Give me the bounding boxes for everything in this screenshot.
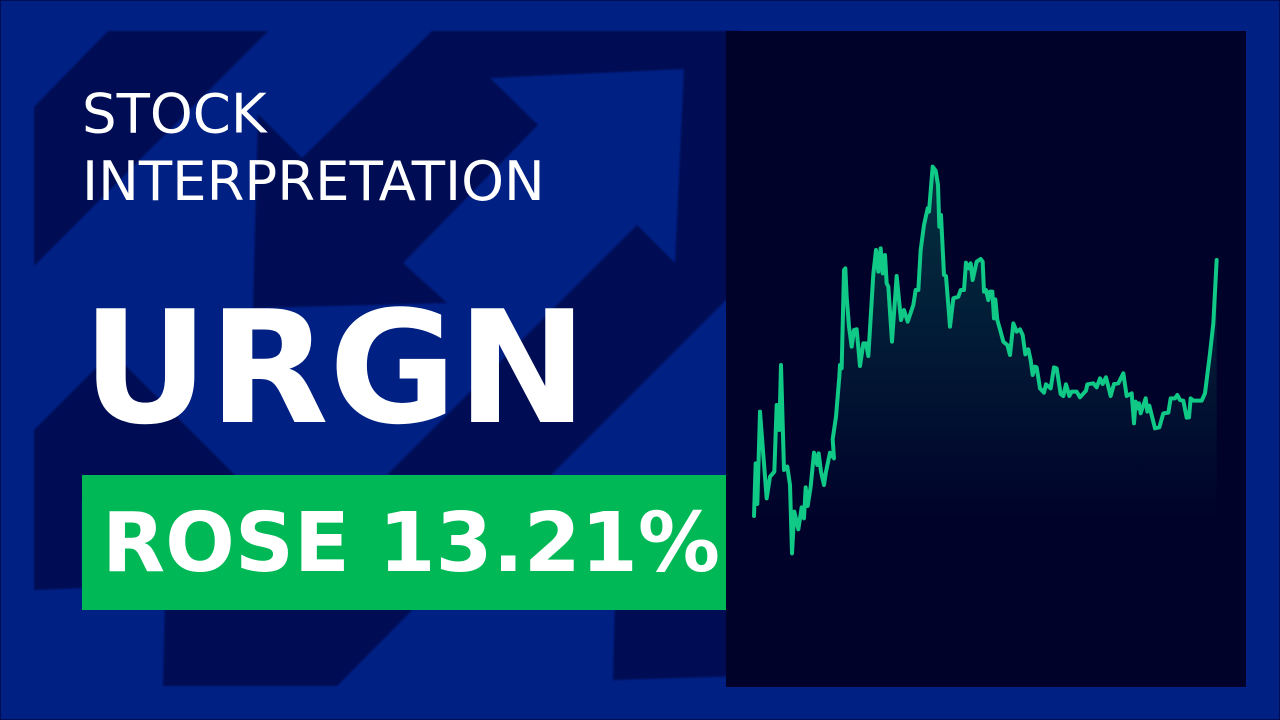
title: INTERPRETATION (82, 149, 545, 213)
change badge: ROSE 13.21% (102, 496, 720, 591)
area fill under price line (754, 167, 1217, 567)
change badge (82, 475, 726, 610)
title (82, 82, 545, 213)
price line (754, 167, 1217, 553)
background arrows pattern (34, 31, 740, 686)
title: STOCK (82, 82, 268, 146)
line chart (754, 167, 1217, 567)
ticker symbol: URGN (82, 277, 587, 459)
chart panel (726, 31, 1246, 687)
